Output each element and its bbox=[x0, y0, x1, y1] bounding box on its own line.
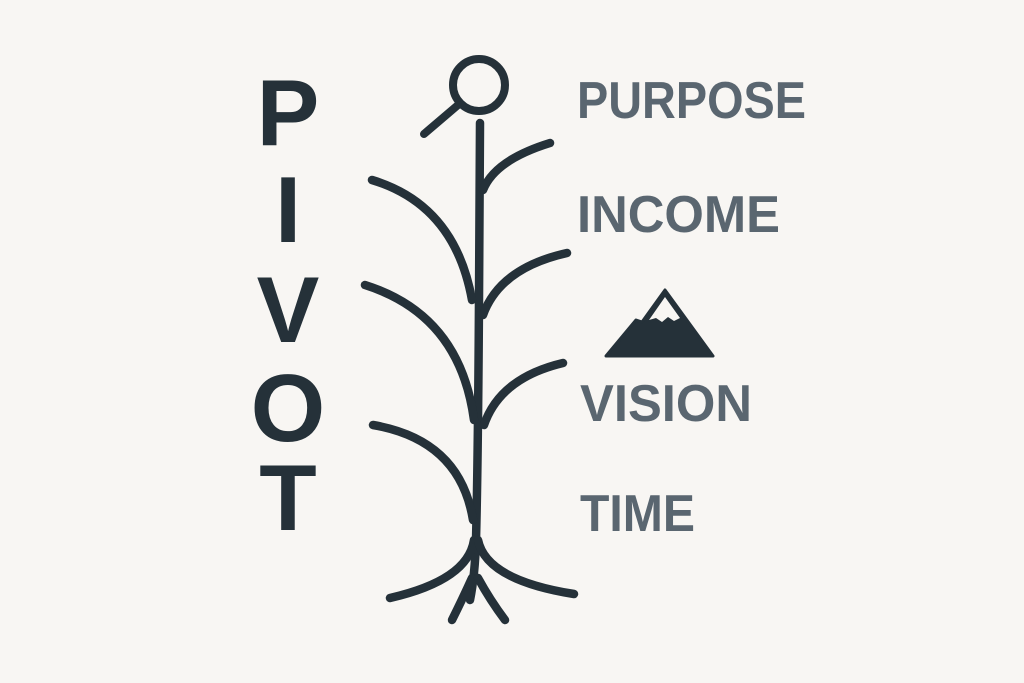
title: PIVOT vertical: O bbox=[251, 355, 325, 462]
labels: TIME bbox=[580, 485, 695, 543]
labels: PURPOSE bbox=[577, 72, 806, 130]
title: PIVOT vertical bbox=[251, 60, 325, 550]
labels: VISION bbox=[580, 375, 752, 433]
tree diagram bbox=[365, 123, 574, 620]
icon: magnifying glass bbox=[424, 59, 505, 134]
title: PIVOT vertical: V bbox=[257, 257, 320, 362]
title: PIVOT vertical: P bbox=[257, 60, 319, 165]
labels bbox=[577, 72, 806, 543]
title: PIVOT vertical: I bbox=[275, 157, 301, 262]
labels: INCOME bbox=[577, 186, 780, 244]
title: PIVOT vertical: T bbox=[259, 445, 317, 550]
icon: mountain bbox=[606, 290, 713, 356]
